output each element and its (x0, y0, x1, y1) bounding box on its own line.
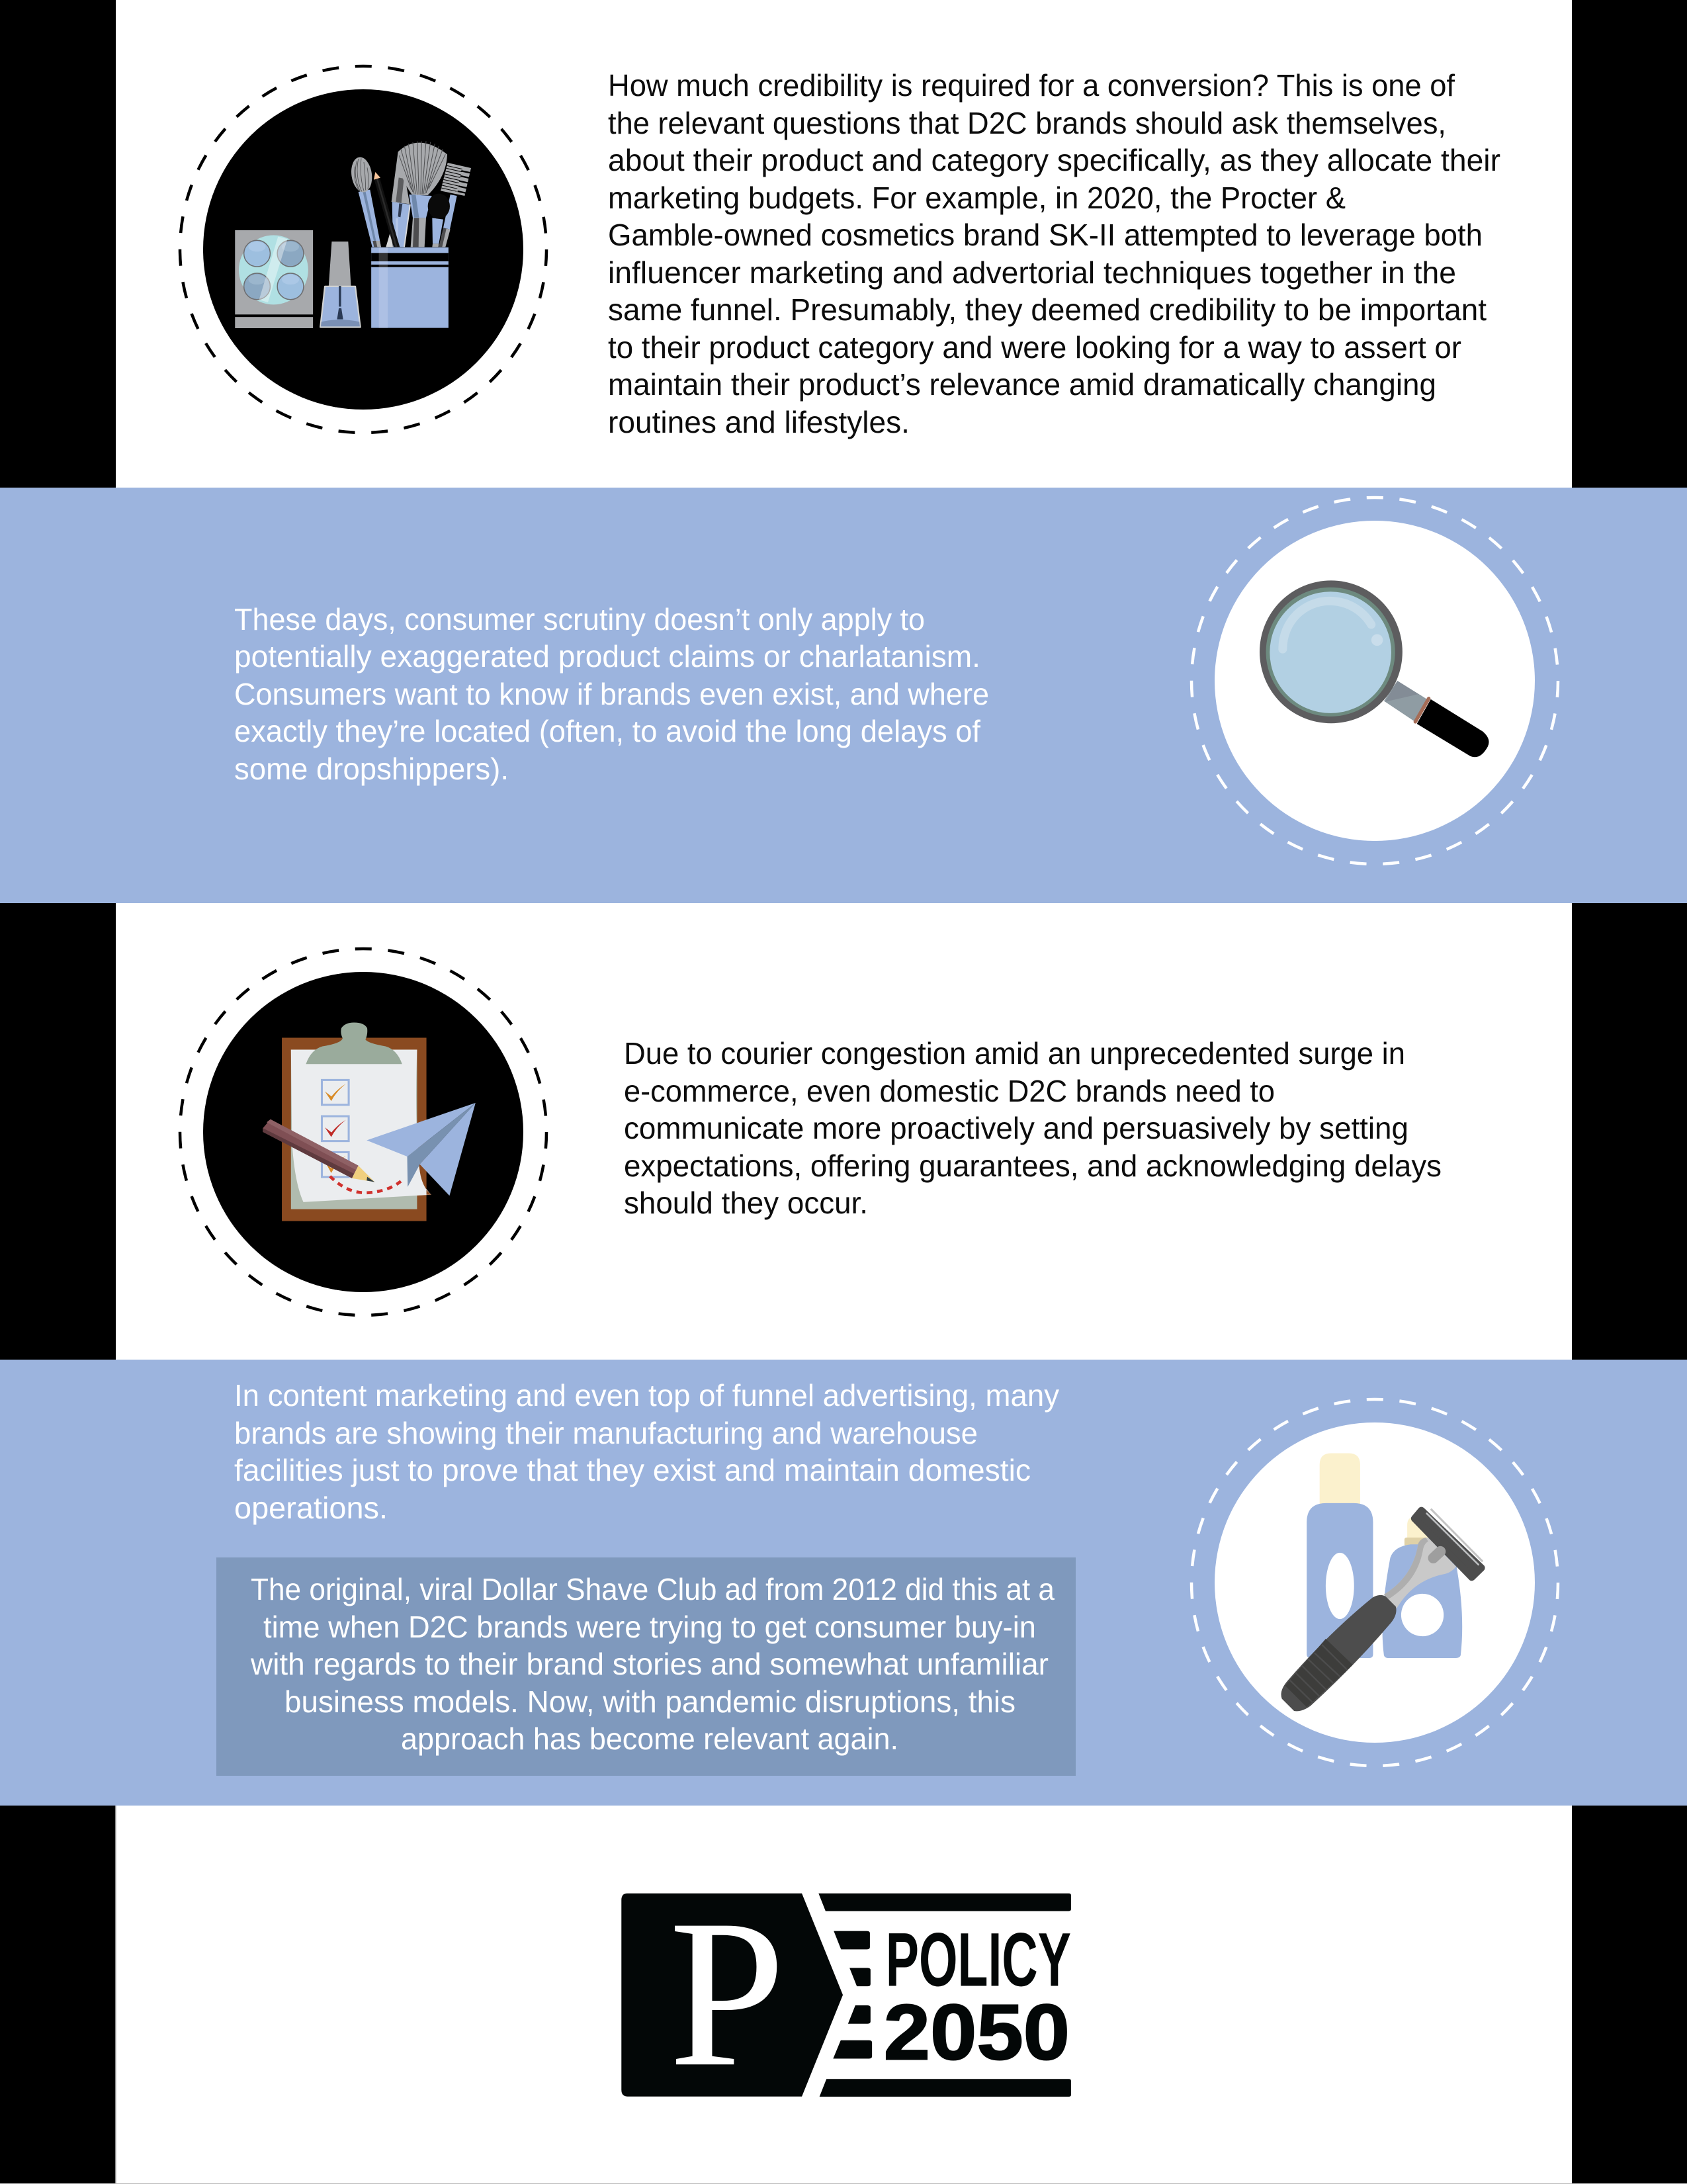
text: consumer scrutiny paragraph: exactly they’re located (often, to avoid the long delays of (234, 714, 980, 748)
logo: Policy 2050 (621, 1876, 1071, 2111)
logo: Policy 2050: P (669, 1876, 785, 2111)
text: courier congestion paragraph (624, 1036, 1442, 1220)
text: courier congestion paragraph: Due to courier congestion amid an unprecedented surge in (624, 1036, 1405, 1070)
text: credibility paragraph: influencer marketing and advertorial techniques together in the (608, 255, 1456, 290)
callout: Dollar Shave Club: approach has become relevant again. (401, 1722, 898, 1756)
text: credibility paragraph: routines and lifestyles. (608, 405, 910, 439)
text: content marketing paragraph (234, 1378, 1059, 1525)
text: consumer scrutiny paragraph: Consumers want to know if brands even exist, and where (234, 677, 989, 711)
panel: manufacturing facilities (0, 1360, 1687, 1806)
text: content marketing paragraph: In content marketing and even top of funnel advertising, many (234, 1378, 1059, 1413)
text: consumer scrutiny paragraph: These days, consumer scrutiny doesn’t only apply to (234, 602, 925, 636)
panel: footer (116, 1806, 1572, 2183)
icon: clipboard and paper plane (180, 949, 546, 1315)
icon: magnifying glass (1191, 498, 1558, 864)
text: credibility paragraph: same funnel. Presumably, they deemed credibility to be important (608, 292, 1487, 327)
text: courier congestion paragraph: communicate more proactively and persuasively by setting (624, 1111, 1408, 1145)
text: credibility paragraph: How much credibility is required for a conversion? This is one of (608, 68, 1455, 103)
panel: footer: POLICY (886, 1917, 1071, 2002)
callout: Dollar Shave Club: business models. Now, with pandemic disruptions, this (284, 1684, 1016, 1719)
panel: courier congestion (116, 903, 1572, 1360)
callout: Dollar Shave Club (216, 1557, 1076, 1776)
text: consumer scrutiny paragraph (234, 602, 989, 786)
text: credibility paragraph: marketing budgets. For example, in 2020, the Procter & (608, 181, 1346, 215)
text: content marketing paragraph: facilities just to prove that they exist and maintain domestic (234, 1453, 1031, 1487)
text: courier congestion paragraph: expectations, offering guarantees, and acknowledging delays (624, 1149, 1442, 1183)
callout: Dollar Shave Club: time when D2C brands were trying to get consumer buy-in (263, 1610, 1036, 1644)
text: credibility paragraph: about their product and category specifically, as they allocate their (608, 143, 1500, 177)
text: courier congestion paragraph: should they occur. (624, 1186, 868, 1220)
text: credibility paragraph: the relevant questions that D2C brands should ask themselves, (608, 106, 1446, 140)
panel: credibility (116, 0, 1572, 488)
text: content marketing paragraph: brands are showing their manufacturing and warehouse (234, 1416, 978, 1450)
text: credibility paragraph: to their product category and were looking for a way to assert or (608, 330, 1461, 365)
logo: Policy 2050: 2050 (884, 1989, 1070, 2076)
text: credibility paragraph (608, 68, 1500, 439)
text: consumer scrutiny paragraph: some dropshippers). (234, 752, 509, 786)
callout: Dollar Shave Club: The original, viral Dollar Shave Club ad from 2012 did this at a (251, 1572, 1055, 1606)
text: content marketing paragraph: operations. (234, 1491, 388, 1525)
icon: razor and bottles (1191, 1399, 1558, 1766)
text: credibility paragraph: maintain their product’s relevance amid dramatically changing (608, 367, 1436, 402)
panel: consumer scrutiny (0, 488, 1687, 903)
icon: cosmetics (180, 66, 546, 433)
callout: Dollar Shave Club: with regards to their brand stories and somewhat unfamiliar (250, 1647, 1049, 1681)
text: courier congestion paragraph: e-commerce, even domestic D2C brands need to (624, 1074, 1275, 1108)
text: consumer scrutiny paragraph: potentially exaggerated product claims or charlatanism. (234, 639, 980, 674)
text: credibility paragraph: Gamble-owned cosmetics brand SK-II attempted to leverage both (608, 218, 1483, 252)
